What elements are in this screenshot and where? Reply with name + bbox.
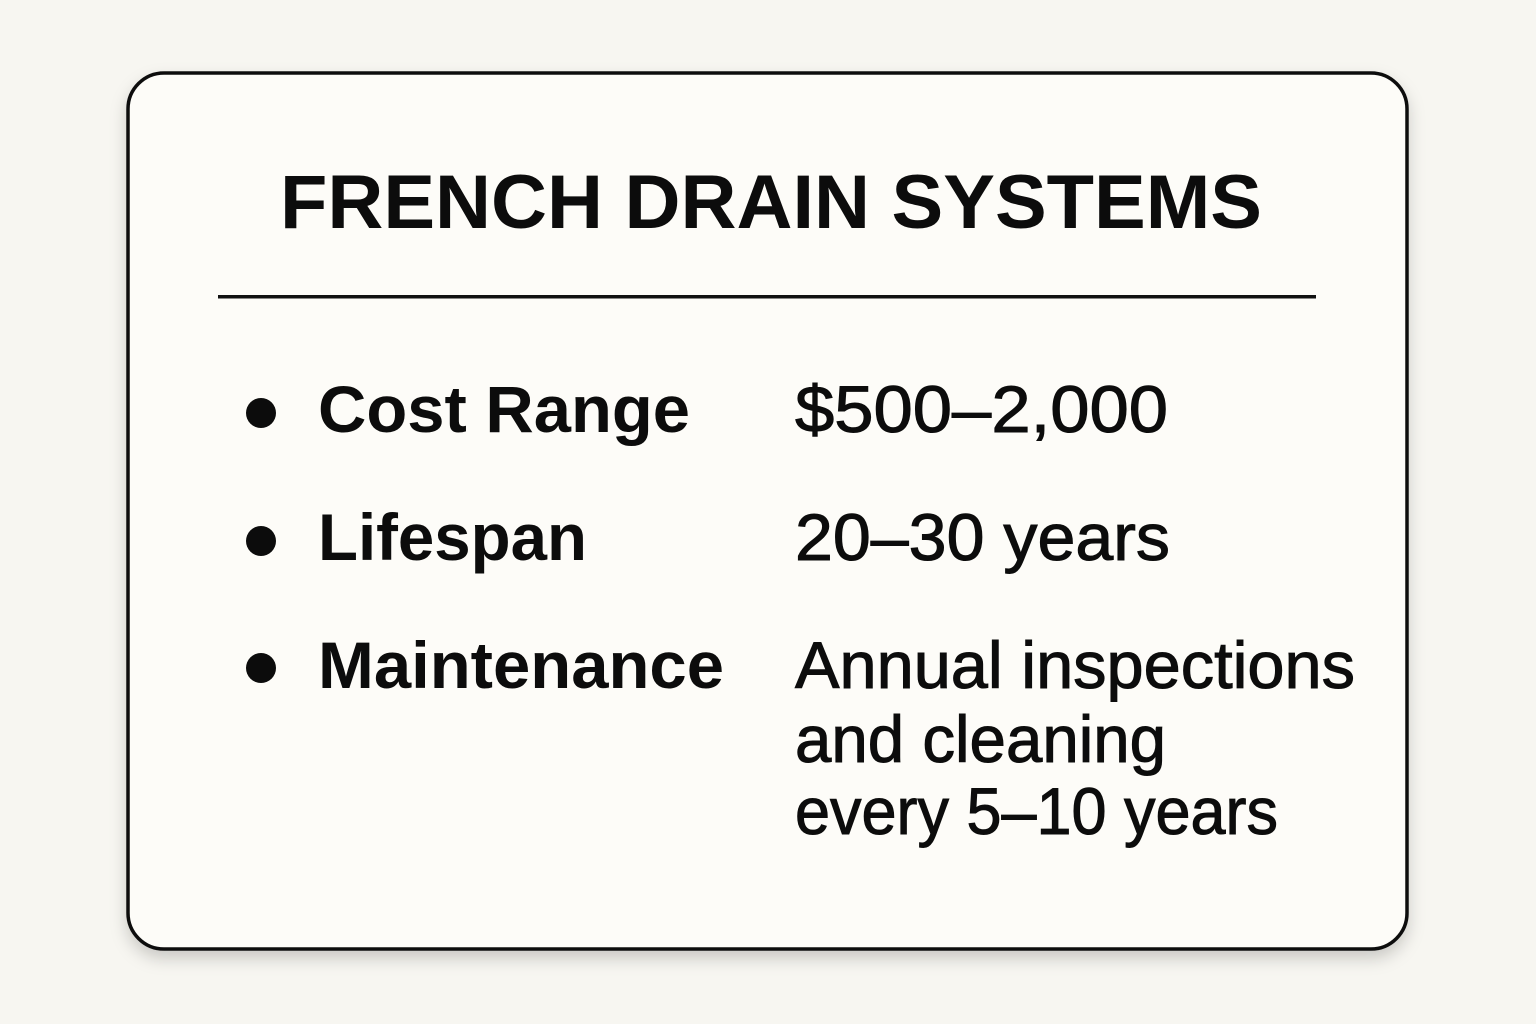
panel: card: [128, 73, 1407, 949]
row: cost range: Cost Range: [318, 372, 690, 446]
row: maintenance: [246, 628, 1355, 848]
row: cost range: $500–2,000: [795, 372, 1168, 446]
row: lifespan: [246, 500, 1170, 574]
row: maintenance: and cleaning: [795, 702, 1166, 776]
row: maintenance: Annual inspections: [795, 628, 1355, 702]
row: maintenance: Maintenance: [318, 628, 724, 702]
row: lifespan: Lifespan: [318, 500, 587, 574]
row: cost range: [246, 372, 1168, 446]
title: FRENCH DRAIN SYSTEMS: [280, 160, 1262, 245]
row: maintenance: every 5–10 years: [795, 774, 1278, 848]
row: lifespan: 20–30 years: [795, 500, 1170, 574]
